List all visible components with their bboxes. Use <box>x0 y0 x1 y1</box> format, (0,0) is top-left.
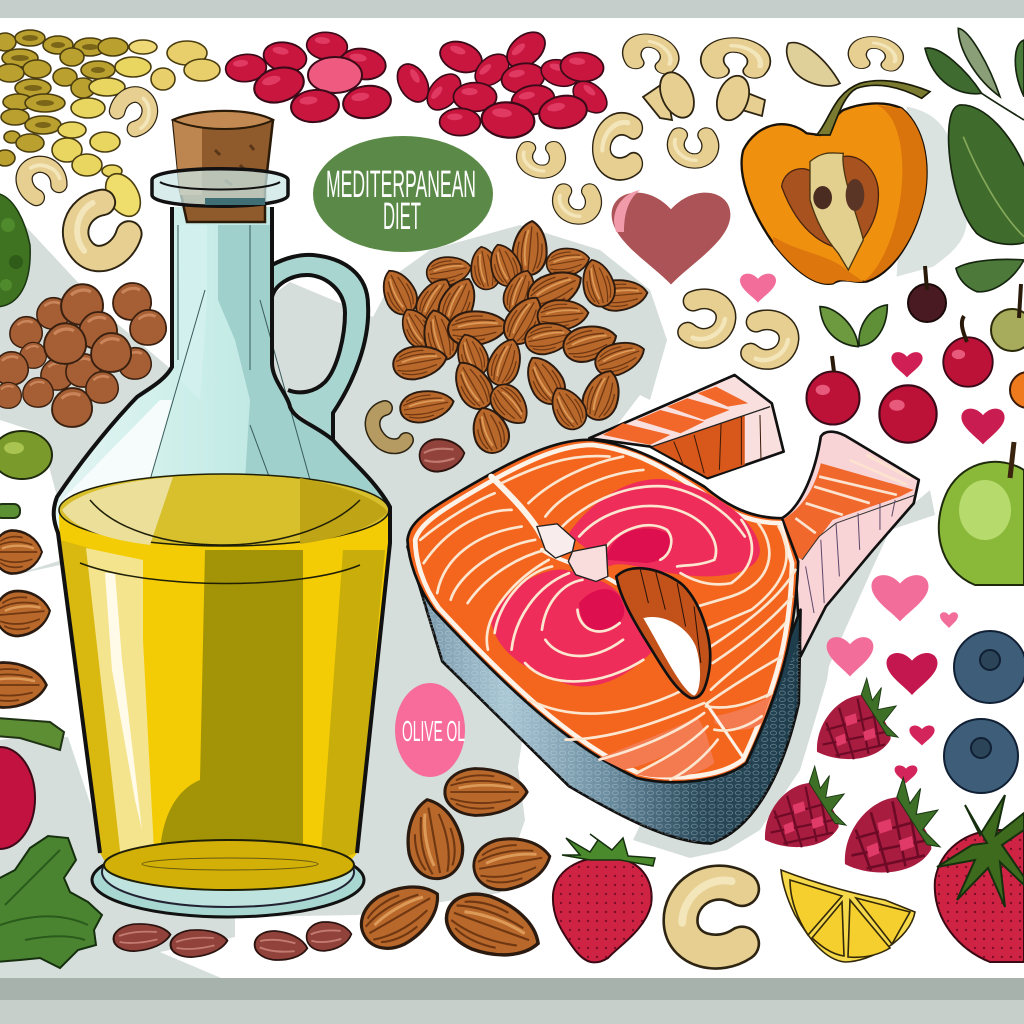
coral lobes <box>599 695 772 778</box>
strawberries <box>553 795 1024 962</box>
glass shading <box>60 225 390 560</box>
oil <box>59 474 390 890</box>
label: Mediterranean diet: MEDITERPANEAN <box>326 164 476 206</box>
backbone <box>537 524 608 581</box>
mushroom-shaped cashews <box>643 67 765 125</box>
infographic canvas: OLIVE OL <box>402 716 465 748</box>
lemon slice <box>781 870 915 962</box>
bottle glass <box>54 207 390 853</box>
base plate <box>92 837 364 917</box>
cherries <box>806 266 1024 443</box>
collar <box>152 169 288 206</box>
strawberry left <box>553 834 655 962</box>
cashews left <box>18 88 158 268</box>
flesh <box>407 440 798 782</box>
cashew bottom <box>681 880 742 952</box>
large heart <box>612 190 730 284</box>
oil surface <box>59 474 389 546</box>
raspberries <box>765 678 940 873</box>
cashews top <box>523 38 897 364</box>
central seam <box>491 477 542 536</box>
loose almonds bottom <box>112 769 554 970</box>
leaves top right <box>820 28 1024 347</box>
red beans right cluster <box>391 25 613 140</box>
olive oil bottle <box>54 111 390 917</box>
persimmon <box>742 43 967 284</box>
upper fillet piece <box>589 375 784 478</box>
almond pile <box>373 220 649 473</box>
red beans left cluster <box>224 31 393 124</box>
tail <box>782 432 919 656</box>
hole <box>616 568 710 698</box>
cork <box>173 111 273 222</box>
pink swirl bottom <box>491 569 657 686</box>
label: olive oil <box>395 683 465 777</box>
broccoli <box>0 193 30 307</box>
hazelnuts <box>0 283 166 427</box>
salmon steak <box>407 375 919 844</box>
label: Mediterranean diet: DIET <box>383 196 421 238</box>
seeds pile top left <box>0 30 220 222</box>
left edge foods <box>0 431 64 849</box>
leafy greens <box>0 836 102 968</box>
skin <box>407 546 801 844</box>
bottle handle <box>272 255 368 440</box>
small hearts <box>740 274 1005 783</box>
strawberry right <box>935 795 1024 962</box>
label: Mediterranean diet <box>313 136 493 252</box>
green apple <box>939 442 1024 585</box>
blueberries <box>944 631 1024 793</box>
marbling lines <box>420 456 795 780</box>
pink swirl top <box>569 479 760 576</box>
pale rim of flesh <box>415 445 792 777</box>
oil bottom <box>104 840 354 890</box>
bottle outline <box>54 207 390 853</box>
